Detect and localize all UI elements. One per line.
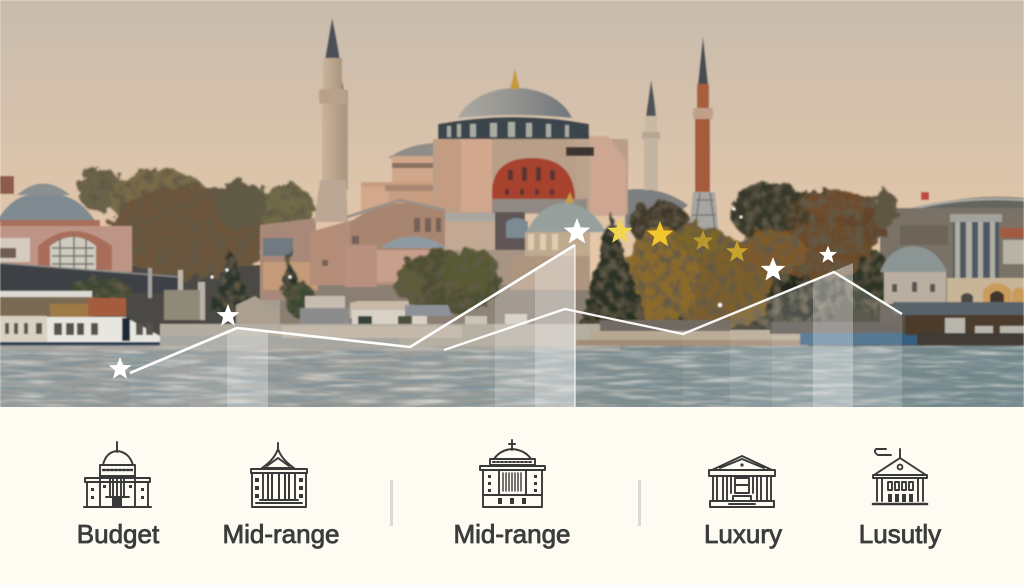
central rear buildings: [260, 150, 705, 300]
star white 1: [109, 357, 131, 379]
left domed building: [0, 176, 132, 272]
trend line two: [444, 272, 902, 350]
star white 2: [217, 304, 239, 326]
minaret: right brick: [689, 37, 719, 235]
minaret: middle slender: [642, 80, 660, 190]
star white 4: [761, 257, 785, 281]
label: Lusutly: Lusutly: [859, 519, 941, 549]
water: [0, 345, 1024, 408]
sparkle lights: [210, 208, 742, 307]
star gold dim 3: [693, 230, 713, 250]
icon: mid-range portico building: [251, 443, 307, 507]
ferry boat on the left: [0, 291, 160, 349]
label: Budget: Budget: [77, 519, 160, 549]
buttresses: [460, 134, 492, 212]
background right of minaret: [880, 192, 1024, 303]
faint columns, group 1: [130, 347, 189, 407]
icon: luxury temple: [709, 456, 775, 507]
star gold 2: [647, 221, 673, 246]
dark conifers left: [70, 245, 315, 318]
panel: hotel tier legend: [0, 407, 1024, 585]
main wall: [433, 139, 628, 214]
main dome: [458, 88, 572, 118]
label: Mid-range second: Mid-range: [453, 519, 571, 549]
Hagia Sophia main body: [361, 68, 628, 216]
pier restaurant on the right: [893, 302, 1024, 345]
icon: mid-range dome hall: [480, 440, 545, 507]
dark pavilions: [495, 212, 528, 250]
label: Mid-range: Mid-range: [222, 519, 340, 549]
half dome left: [388, 143, 438, 160]
lower-left church facade: [310, 200, 525, 287]
rising columns, group 2: [411, 295, 495, 407]
sky: [0, 0, 1024, 300]
star gold dim 4: [726, 240, 748, 261]
photo: Hagia Sophia skyline over the Bosphorus: [0, 0, 1024, 408]
star gold 1: [607, 218, 633, 243]
minaret: far left stone: [314, 18, 348, 222]
right dome and tower: [880, 214, 1024, 304]
main arch: [492, 158, 575, 202]
bright column, group 1: [227, 328, 268, 407]
columns, group 3: [683, 314, 730, 407]
elevated road and posts: [0, 263, 205, 320]
front small dome: [510, 192, 606, 290]
gold finial: [511, 68, 519, 89]
label: Luxury: Luxury: [704, 519, 782, 549]
left trees: [78, 168, 315, 278]
icon: luxury hall with flag: [873, 449, 927, 504]
star white 5: [819, 246, 837, 263]
mid foreground tree: [394, 248, 500, 314]
star white 3: [564, 218, 590, 243]
central waterfront buildings: [236, 296, 527, 330]
rating stars: [109, 218, 837, 379]
shore backing: [0, 265, 1024, 350]
shoreline wall: [160, 320, 918, 349]
drum: [438, 117, 589, 139]
right tree belt: [578, 182, 897, 335]
column edge: [574, 245, 576, 407]
icon: budget domed building: [84, 442, 151, 507]
chart overlay: translucent stepped columns and trend lines: [130, 245, 902, 407]
trend line one: [130, 245, 575, 373]
